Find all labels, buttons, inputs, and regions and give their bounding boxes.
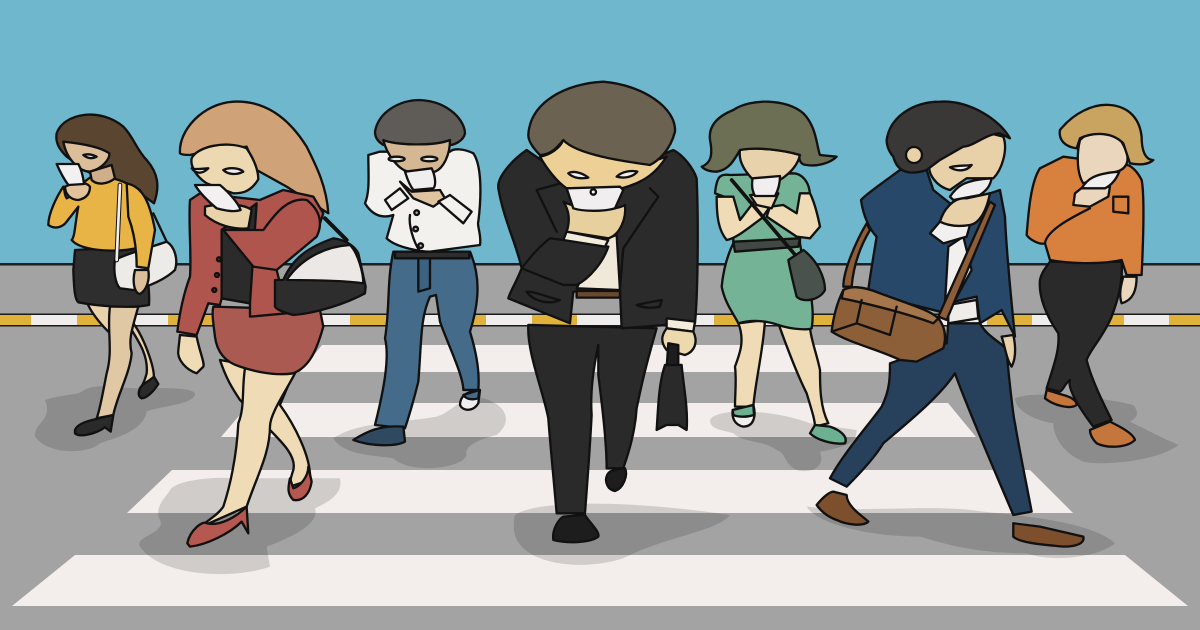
- person 2: woman in red suit with handbag: [177, 102, 366, 547]
- crosswalk stripes: [12, 345, 1188, 606]
- road surface with kerb line: [0, 263, 1200, 630]
- person 1: woman in yellow top with white bag: [48, 115, 176, 435]
- person 6: man in navy suit with brown messenger bag: [817, 102, 1084, 547]
- person 3: man in white shirt and jeans: [353, 100, 480, 445]
- person 7: man in orange shirt and black trousers: [1027, 105, 1153, 447]
- person 4: central man in black suit with briefcase: [498, 82, 698, 542]
- person 5: woman in green dress with shoulder bag: [702, 102, 846, 444]
- sky background: [0, 0, 1200, 264]
- ground shadows: [35, 386, 1178, 574]
